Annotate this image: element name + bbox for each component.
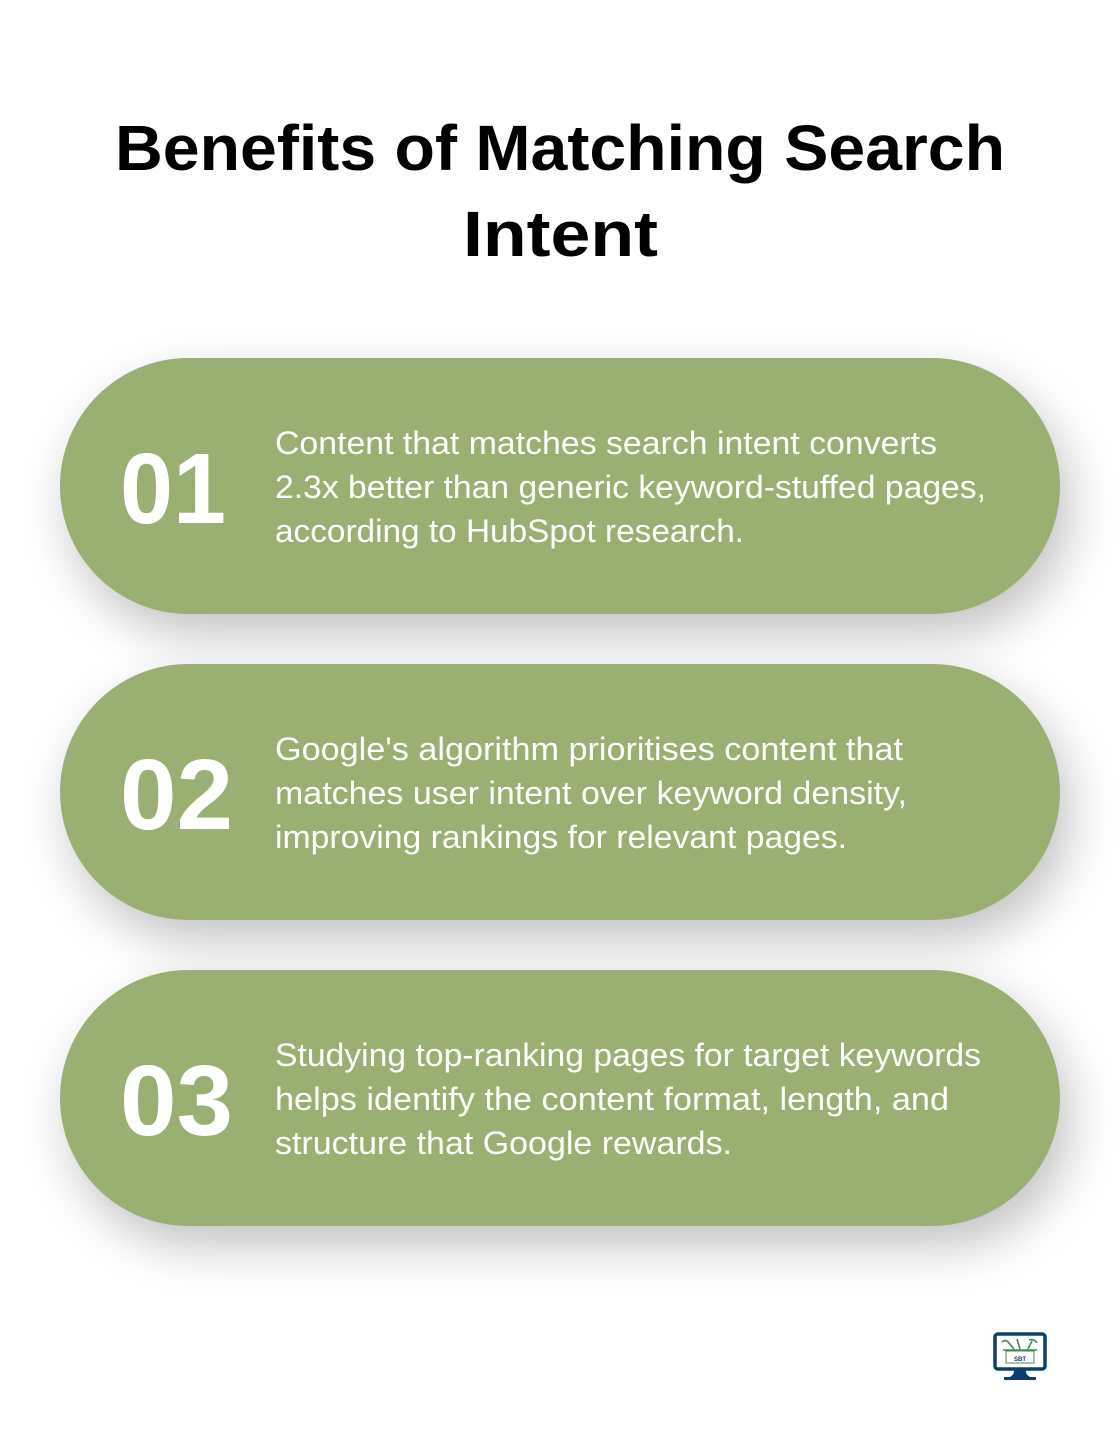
card background 02 [60,664,1060,920]
title: Benefits of Matching Search [115,112,1005,184]
number 03: 03 [120,1045,233,1157]
panel: benefit 01 [60,358,1060,614]
text block 03: helps identify the content format, length, and [275,1081,949,1117]
text block 02 [275,731,907,855]
text block 03: structure that Google rewards. [275,1125,732,1161]
text block 03 [275,1037,981,1161]
text block 01: 2.3x better than generic keyword-stuffed pages, [275,469,986,505]
text block 01: Content that matches search intent converts [275,425,937,461]
panel: benefit 03 [60,970,1060,1226]
text block 02: matches user intent over keyword density, [275,775,907,811]
icon: monitor with toolbox logo [995,1334,1045,1380]
text block 01: according to HubSpot research. [275,513,744,549]
text block 03: Studying top-ranking pages for target keywords [275,1037,981,1073]
number 02: 02 [120,739,233,851]
title: Intent [463,198,658,270]
number 01: 01 [120,433,226,545]
title [115,112,1005,270]
card background 03 [60,970,1060,1226]
panel: benefit 02 [60,664,1060,920]
text block 02: improving rankings for relevant pages. [275,819,847,855]
icon: monitor with toolbox logo: SBT [1014,1357,1026,1363]
text block 02: Google's algorithm prioritises content that [275,731,903,767]
text block 01 [275,425,986,549]
card background 01 [60,358,1060,614]
